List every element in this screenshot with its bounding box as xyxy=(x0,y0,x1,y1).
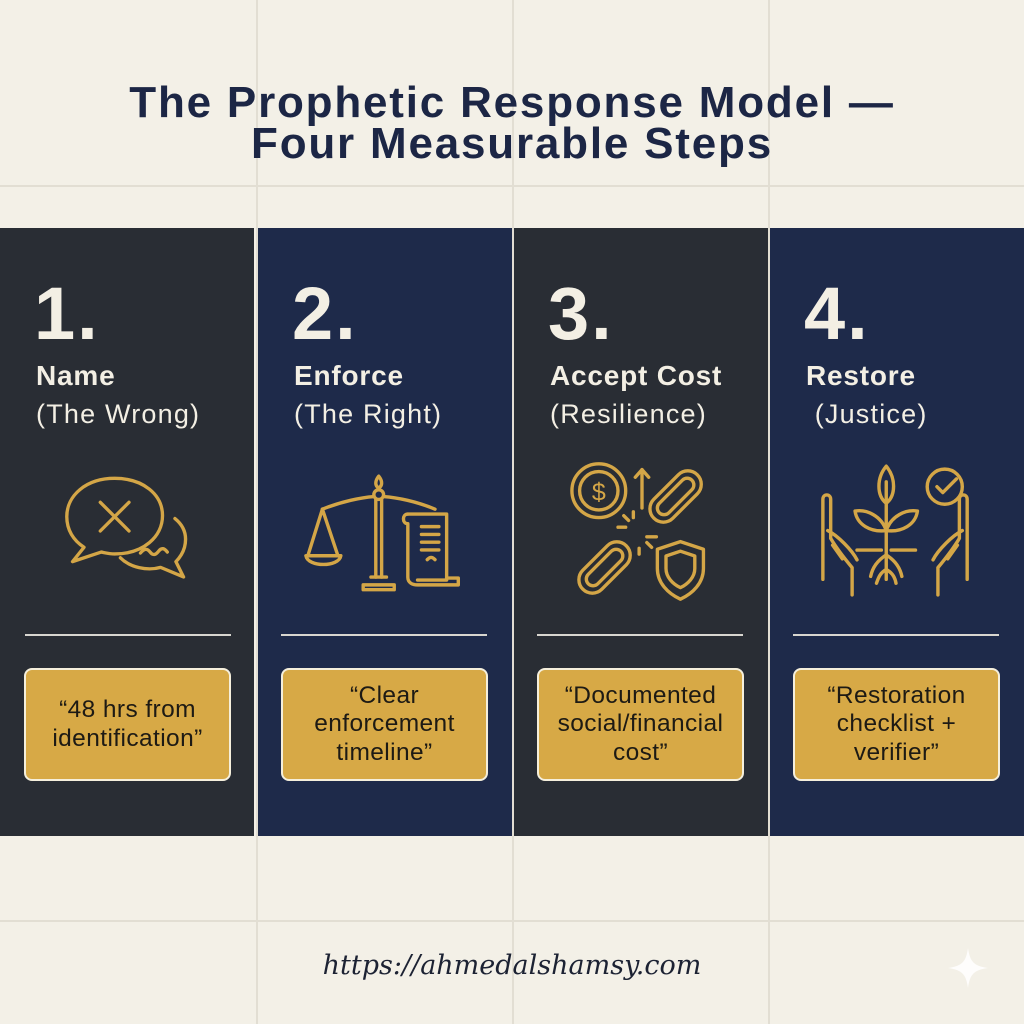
heading: accept cost: Accept Cost xyxy=(550,360,722,391)
divider xyxy=(281,634,487,636)
icon: broken chain, coin, shield xyxy=(570,462,706,601)
callout box: “48 hrs from xyxy=(59,696,196,723)
heading: name: Name xyxy=(36,360,115,391)
callout box: identification” xyxy=(52,724,203,752)
title xyxy=(129,78,895,168)
icon: speech bubbles xyxy=(65,476,188,579)
panel: step 3 xyxy=(514,228,768,836)
number 4: 4. xyxy=(804,272,870,355)
number 3: 3. xyxy=(548,272,614,355)
callout box xyxy=(281,668,488,781)
title: The Prophetic Response Model — xyxy=(129,78,895,127)
divider xyxy=(25,634,231,636)
panel: step 1 xyxy=(0,228,254,836)
number 2: 2. xyxy=(292,272,358,355)
divider xyxy=(537,634,743,636)
callout box: “Restoration xyxy=(827,682,966,709)
callout box xyxy=(793,668,1000,781)
icon: broken chain, coin, shield: $ xyxy=(592,478,606,506)
callout box: checklist + xyxy=(837,710,956,737)
callout box: social/financial xyxy=(558,710,723,737)
callout box: “Clear xyxy=(350,682,419,709)
subtitle: (Justice) xyxy=(815,399,928,429)
divider xyxy=(793,634,999,636)
title: Four Measurable Steps xyxy=(251,119,773,168)
footer url: https://ahmedalshamsy.com xyxy=(323,950,701,981)
icon: sparkle xyxy=(950,950,986,987)
heading: restore: Restore xyxy=(806,360,916,391)
panel: step 2 xyxy=(258,228,512,836)
callout box: enforcement xyxy=(314,710,455,737)
icon: hands with plant xyxy=(821,464,969,597)
panel: step 4 xyxy=(770,228,1024,836)
subtitle: (Resilience) xyxy=(550,399,707,429)
callout box: cost” xyxy=(613,739,668,766)
subtitle: (The Wrong) xyxy=(36,399,200,429)
number 1: 1. xyxy=(34,272,100,355)
icon: scales and scroll xyxy=(304,474,460,592)
callout box xyxy=(24,668,231,781)
heading: enforce: Enforce xyxy=(294,360,404,391)
callout box: timeline” xyxy=(336,739,433,766)
callout box: “Documented xyxy=(565,682,716,709)
callout box xyxy=(537,668,744,781)
callout box: verifier” xyxy=(854,739,939,766)
subtitle: (The Right) xyxy=(294,399,442,429)
